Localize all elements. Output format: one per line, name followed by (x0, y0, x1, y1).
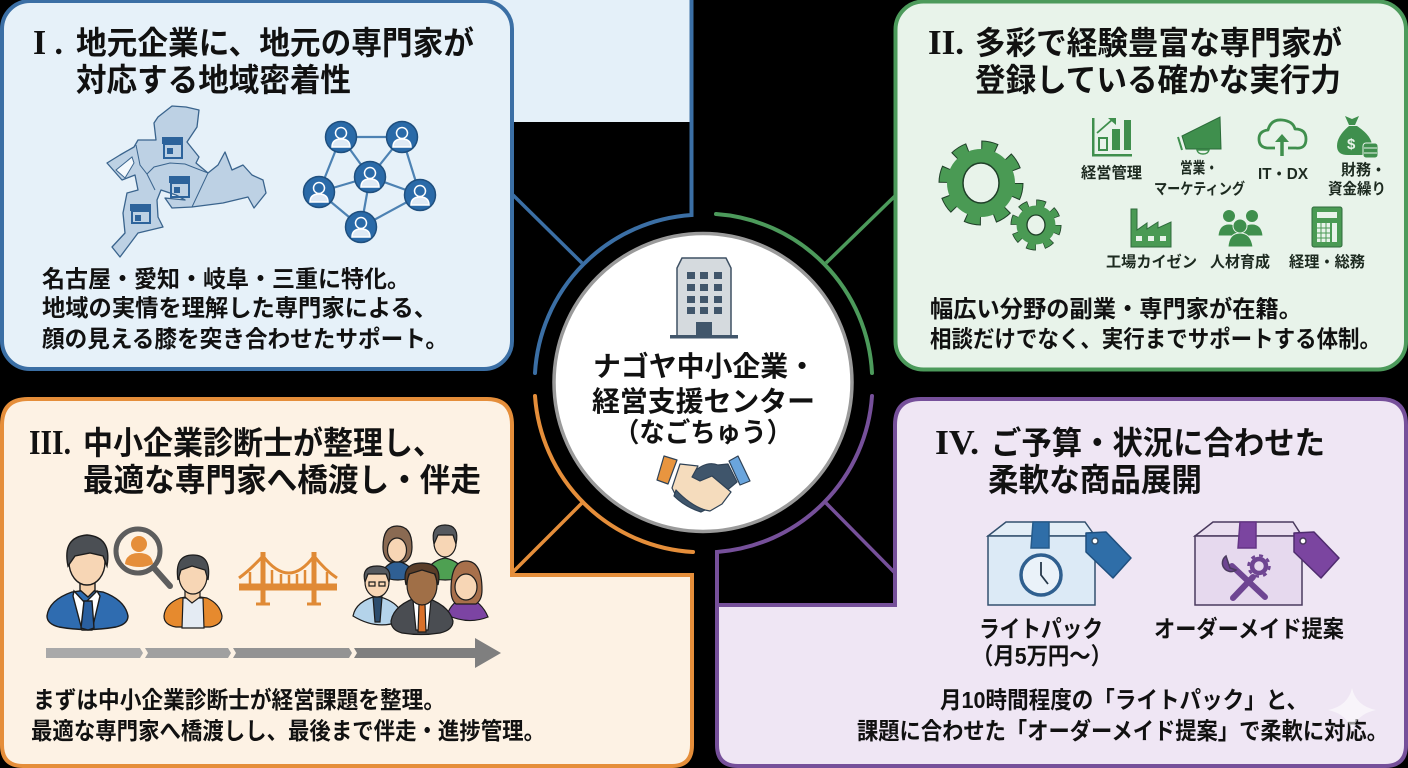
label: sales and marketing (1154, 158, 1245, 198)
label: light pack (972, 616, 1112, 669)
text: panel II description: 幅広い分野の副業・専門家が在籍。 (930, 295, 1302, 322)
heading: panel II: II. (928, 23, 964, 62)
text: panel III description: 最適な専門家へ橋渡しし、最後まで伴走・進捗管理。 (31, 718, 545, 744)
heading: panel I (33, 23, 474, 98)
label: sales and marketing: マーケティング (1154, 179, 1245, 198)
text: panel I description: 地域の実情を理解した専門家による、 (42, 295, 437, 321)
text: panel I description: 顔の見える膝を突き合わせたサポート。 (42, 326, 448, 352)
icon: magnifying glass (116, 529, 170, 586)
heading: panel III: 最適な専門家へ橋渡し・伴走 (83, 462, 481, 498)
text: panel I description (42, 266, 448, 352)
icon: people (1218, 210, 1263, 247)
icon: handshake (657, 456, 750, 512)
icon: advisor in orange jacket (164, 555, 222, 628)
text: panel IV description: 月10時間程度の「ライトパック」と、 (940, 687, 1308, 713)
label: light pack: （月5万円～） (972, 643, 1112, 669)
heading: panel III (29, 423, 481, 498)
center hub (554, 234, 852, 532)
icon: money bag (1337, 116, 1378, 158)
text: panel III description (31, 686, 545, 744)
heading: panel IV (935, 423, 1325, 498)
text: panel III description: まずは中小企業診断士が経営課題を整理。 (33, 686, 445, 713)
panel III: consultant bridging (2, 396, 693, 766)
heading: panel I: I . (33, 23, 63, 62)
icon: money bag: $ (1347, 136, 1356, 153)
label: human resources: 人材育成 (1210, 252, 1270, 271)
heading: panel III: 中小企業診断士が整理し、 (83, 425, 443, 461)
icon: custom proposal box with tools and tag (1195, 522, 1339, 605)
label: accounting: 経理・総務 (1289, 253, 1365, 271)
arrow: process timeline (46, 638, 501, 668)
icon: office building (670, 258, 738, 338)
icon: calculator (1312, 207, 1342, 247)
heading: panel IV: 柔軟な商品展開 (988, 462, 1202, 498)
heading: panel III: III. (29, 423, 71, 462)
title: center name: （なごちゅう） (614, 417, 792, 448)
title: center name: 経営支援センター (592, 386, 815, 417)
icon: cloud upload (1259, 120, 1306, 156)
icon: megaphone (1178, 117, 1221, 154)
heading: panel I: 地元企業に、地元の専門家が (76, 25, 474, 61)
icon: expert network (304, 122, 436, 242)
watermark sparkle (1328, 688, 1376, 732)
icon: large and small gears (944, 146, 1058, 246)
panel IV: flexible products (717, 396, 1406, 766)
heading: panel II: 登録している確かな実行力 (975, 62, 1341, 98)
panel II: diverse experts (716, 2, 1406, 373)
heading: panel II: 多彩で経験豊富な専門家が (975, 25, 1342, 61)
icon: consultant in blue suit (47, 535, 128, 630)
label: finance (1328, 161, 1386, 198)
icon: Tokai region map with shops (107, 106, 266, 257)
label: sales and marketing: 営業・ (1180, 158, 1218, 177)
title: center name: ナゴヤ中小企業・ (593, 350, 816, 382)
label: management: 経営管理 (1081, 163, 1142, 182)
text: panel I description: 名古屋・愛知・岐阜・三重に特化。 (42, 266, 410, 292)
icon: management chart (1092, 118, 1132, 156)
heading: panel IV: ご予算・状況に合わせた (991, 425, 1325, 461)
heading: panel I: 対応する地域密着性 (76, 62, 351, 98)
label: finance: 財務・ (1341, 161, 1386, 179)
label: IT DX: IT・DX (1258, 166, 1309, 183)
text: panel IV description (857, 687, 1388, 744)
heading: panel II (928, 23, 1342, 98)
label: finance: 資金繰り (1328, 179, 1386, 198)
panel I: local focus (2, 0, 692, 373)
icon: light pack box with clock and tag (988, 522, 1131, 605)
heading: panel IV: IV. (935, 423, 979, 462)
icon: suspension bridge (239, 552, 337, 604)
icon: group of experts (353, 525, 488, 634)
label: light pack: ライトパック (979, 616, 1103, 642)
label: custom proposal: オーダーメイド提案 (1154, 615, 1344, 642)
title: center name (592, 350, 816, 448)
icon: factory (1131, 209, 1171, 247)
label: factory improvement: 工場カイゼン (1106, 252, 1197, 271)
text: panel II description (930, 295, 1381, 352)
